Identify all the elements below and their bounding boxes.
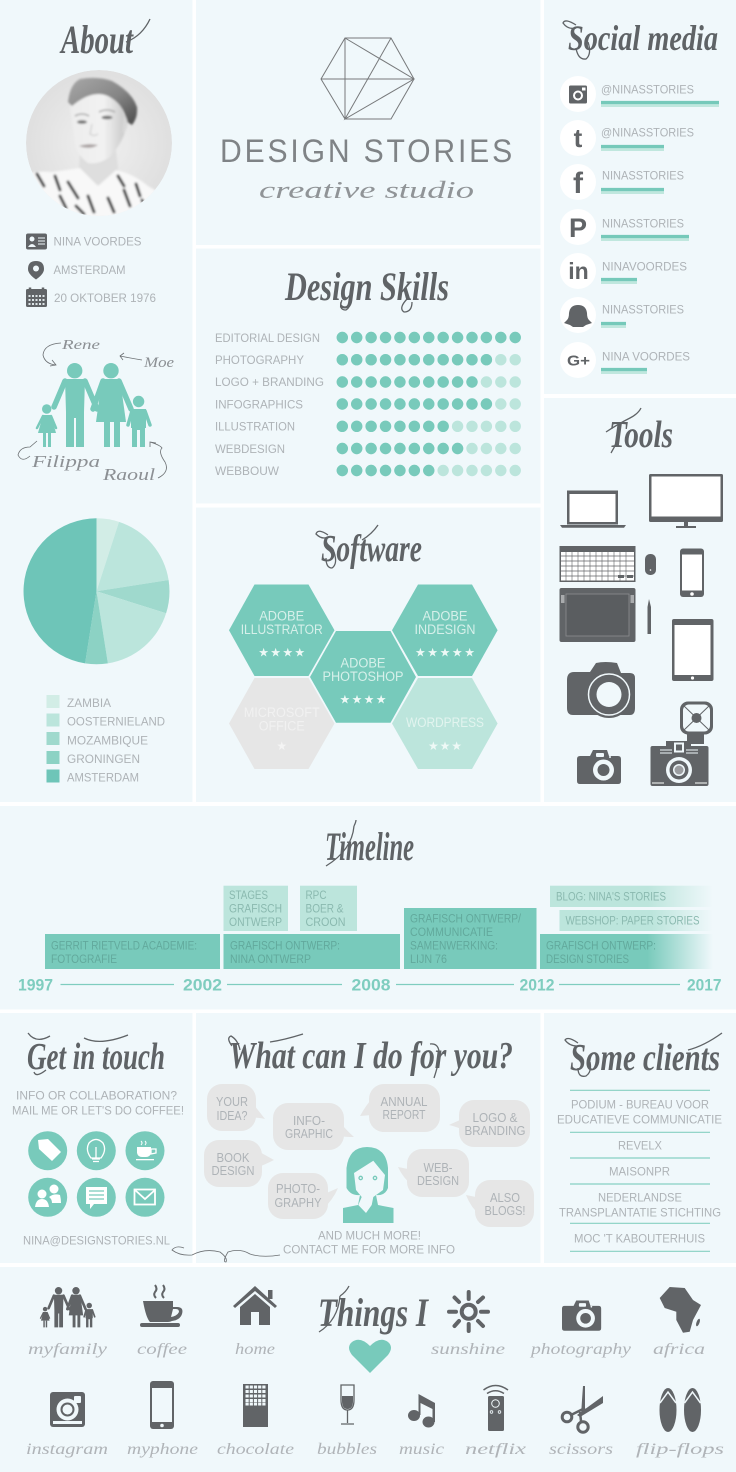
bubble: annual report: ANNUAL [380,1094,428,1109]
contact invitation: INFO OR COLLABORATION? [16,1088,177,1102]
bubble: annual report: REPORT [382,1107,426,1122]
timeline bars: ONTWERP [229,917,282,929]
icon: music note [408,1394,435,1428]
icon: smartphone [680,548,704,597]
icon: compact camera [577,750,621,784]
email address: NINA@DESIGNSTORIES.NL [23,1234,170,1248]
skill dot ratings [342,338,516,470]
timeline bars: FOTOGRAFIE [51,954,117,966]
panel: logo [196,0,540,245]
social icon circles [560,76,596,378]
icon: twitter: t [574,123,583,153]
row one captions: africa [653,1341,705,1358]
skill labels: WEBBOUW [215,464,280,478]
social handles: NINA VOORDES [602,350,690,364]
bubble: photography [268,1173,338,1219]
heading: tools: Tools [609,414,673,456]
row one captions [28,1341,705,1358]
icon: tablet [672,619,714,681]
client names: MOC 'T KABOUTERHUIS [574,1232,705,1246]
client names: PODIUM - BUREAU VOOR [571,1098,709,1112]
contact icon circles [28,1131,165,1217]
pie legend: GRONINGEN [67,752,140,766]
bubble: book design [204,1140,274,1187]
icon: bubbles glass [341,1385,354,1424]
icon: calendar [26,288,47,307]
pie legend: OOSTERNIELAND [67,714,165,728]
row one captions: home [235,1341,275,1358]
flourish: email to contact [172,1247,280,1262]
pie chart [24,518,169,664]
bubble: infographic: GRAPHIC [285,1126,333,1141]
family pictogram [37,363,150,447]
timeline axis: 1997 [18,976,53,994]
icon: sunshine [449,1292,488,1331]
bubble: book design: DESIGN [212,1163,254,1178]
bubble: also blogs [466,1180,534,1227]
icon: pinterest: P [569,213,587,243]
timeline bars: CROON [306,917,346,929]
brand name: DESIGN STORIES [220,133,515,169]
client names: EDUCATIEVE COMMUNICATIE [557,1112,722,1126]
hexagon: adobe photoshop: ADOBE [340,656,386,670]
skill labels: ILLUSTRATION [215,420,295,434]
timeline bars: GRAFISCH ONTWERP: [230,940,340,952]
row one captions: photography [530,1341,632,1358]
client names: REVELX [618,1138,662,1152]
hexagon: adobe indesign [392,584,498,676]
icon: location pin [28,261,44,280]
icon: instagram [569,86,587,104]
client names: NEDERLANDSE [598,1190,682,1204]
icon: light bulb [87,1140,105,1162]
icon: tag [38,1139,61,1161]
hexagon: adobe photoshop: ★★★★ [340,692,386,706]
icon: id card [26,234,47,250]
contact invitation [12,1088,184,1118]
client names [557,1098,722,1246]
bubble: web design [398,1149,469,1197]
pie legend: MOZAMBIQUE [67,734,148,748]
icon: monitor [649,474,723,528]
hexagon: microsoft office [229,678,334,769]
icon: remote [484,1386,508,1431]
icon: snapchat [564,305,592,327]
panel: about [0,0,192,802]
icon: home [233,1286,277,1325]
social handles [601,82,694,364]
hexagon: adobe photoshop [310,631,416,723]
bubble: also blogs: BLOGS! [484,1203,526,1218]
bubble: web design: WEB- [424,1160,452,1175]
hexagon: adobe illustrator: ★★★★ [258,646,305,660]
timeline bars: WEBSHOP: PAPER STORIES [566,916,700,928]
icon: phone [150,1381,174,1429]
heading: timeline: Timeline [325,824,414,869]
icon: facebook: f [573,167,584,200]
icon: stylus [648,599,651,634]
skill labels: LOGO + BRANDING [215,375,324,389]
heading: tools [606,408,673,456]
icon: linkedin: in [568,258,589,284]
row one captions: coffee [137,1341,187,1358]
bubble: book design: BOOK [216,1150,250,1165]
heading: design skills: Design Skills [284,264,449,309]
pie legend: AMSTERDAM [67,770,139,784]
bubble: also blogs: ALSO [490,1190,520,1205]
skill labels: WEBDESIGN [215,442,285,456]
hexagon: adobe illustrator: ILLUSTRATOR [241,622,323,637]
family name annotations: Raoul [102,465,155,484]
hexagon: wordpress: WORDPRESS [406,715,484,730]
timeline bars: BLOG: NINA'S STORIES [556,892,666,904]
timeline bars: SAMENWERKING: [410,940,498,952]
row one captions: sunshine [431,1341,505,1358]
panel: some clients [544,1013,736,1263]
icon: mouse [645,554,656,575]
timeline bars: GRAFISCH [229,904,282,916]
bubble: logo and branding: LOGO & [472,1110,518,1125]
name: NINA VOORDES [54,234,142,248]
timeline axis: 2012 [520,976,554,994]
family name annotations: Moe [143,355,174,371]
closing text [283,1228,455,1256]
bubble: logo and branding: BRANDING [464,1123,526,1138]
icon: flip flops [660,1388,701,1432]
family name annotations: Rene [61,338,100,353]
icon: chat message [86,1187,107,1209]
family name annotations: Filippa [31,452,100,471]
client names: TRANSPLANTATIE STICHTING [559,1206,721,1220]
heading: software: Software [321,528,422,570]
row two captions: flip-flops [636,1441,724,1458]
client names: MAISONPR [609,1164,670,1178]
row two captions: myphone [127,1441,198,1458]
panel: what can i do for you [196,1013,540,1263]
timeline bars: RPC [306,890,326,902]
pie legend: ZAMBIA [67,696,111,710]
icon: google plus: G+ [567,352,590,370]
panel: software [196,508,540,802]
bubble: web design: DESIGN [417,1173,459,1188]
bubble: annual report [360,1084,440,1132]
icon: chocolate [243,1384,268,1427]
icon: photography camera [562,1300,601,1331]
hexagon: microsoft office: MICROSOFT [244,705,320,720]
panel: things i like [0,1267,736,1472]
hexagon: adobe photoshop: PHOTOSHOP [322,669,404,684]
closing text: CONTACT ME FOR MORE INFO [283,1242,455,1256]
timeline axis: 2008 [352,976,390,994]
timeline bars: STAGES [229,890,268,902]
bubble: infographic [273,1103,354,1150]
icon: people [35,1184,61,1207]
timeline bars [45,886,713,969]
row two captions: scissors [549,1441,613,1458]
contact invitation: MAIL ME OR LET'S DO COFFEE! [12,1104,184,1118]
icon: envelope [134,1190,155,1204]
skill labels: INFOGRAPHICS [215,398,303,412]
logo hexagon [321,38,414,119]
heading: software [316,525,422,570]
timeline bars: COMMUNICATIE [410,927,493,939]
hexagon: microsoft office: ★ [276,739,287,753]
heading: get in touch: Get in touch [27,1036,165,1078]
timeline bars: NINA ONTWERP [230,954,311,966]
icon: drawing tablet [560,588,636,642]
icon: instagram [50,1392,85,1427]
icon: dslr camera [567,662,635,718]
bubble: infographic: INFO- [293,1113,325,1128]
timeline bars: GRAFISCH ONTWERP/ [410,914,522,926]
panel: get in touch [0,1013,192,1263]
hexagon: wordpress [392,678,498,769]
icon: africa [660,1287,701,1333]
panel: design skills [196,248,540,504]
hexagon: microsoft office: OFFICE [259,718,305,734]
skill labels: EDITORIAL DESIGN [215,331,320,345]
bubble: photography: PHOTO- [276,1181,320,1196]
pie legend [46,695,165,784]
timeline bars: GRAFISCH ONTWERP: [546,940,656,952]
family name annotations [18,338,174,484]
icon: keyboard [560,546,636,582]
bubble: your idea: YOUR [216,1094,248,1109]
bubble: logo and branding [449,1100,530,1147]
row two captions [26,1441,724,1458]
row one captions: myfamily [28,1341,108,1358]
timeline bars: LIJN 76 [410,954,447,966]
timeline bars: BOER & [306,904,344,916]
social reach bars [601,102,719,372]
hexagon: adobe illustrator: ADOBE [259,608,304,624]
hexagon: adobe indesign: ★★★★★ [415,646,475,660]
row two captions: instagram [26,1441,108,1458]
heading: timeline [325,820,414,869]
icon: coffee cup [136,1141,156,1160]
icon: heart [349,1340,391,1373]
timeline axis: 2002 [183,976,222,994]
avatar illustration [343,1147,394,1223]
social handles: @NINASSTORIES [601,82,694,96]
row two captions: music [399,1441,444,1458]
icon: scissors [562,1386,603,1432]
icon: coffee [140,1285,182,1327]
bubble: your idea: IDEA? [216,1108,248,1123]
tagline: creative studio [259,178,474,204]
social handles: NINASSTORIES [602,302,684,316]
skill labels: PHOTOGRAPHY [215,353,304,367]
social handles: @NINASSTORIES [601,126,694,140]
hexagon: adobe indesign: INDESIGN [414,622,476,637]
row two captions: netflix [465,1441,526,1458]
timeline bars: GERRIT RIETVELD ACADEMIE: [51,940,197,952]
panel: timeline [0,806,736,1010]
birth date: 20 OKTOBER 1976 [54,291,156,305]
heading: things i: Things I [318,1290,429,1335]
hexagon: wordpress: ★★★ [428,739,462,753]
row two captions: bubbles [317,1441,377,1458]
closing text: AND MUCH MORE! [318,1228,421,1242]
timeline axis [18,976,722,994]
heading: about: About [59,17,134,62]
icon: laptop [560,490,626,528]
city: AMSTERDAM [54,263,126,277]
icon: family [40,1287,95,1327]
timeline bars: DESIGN STORIES [546,954,629,966]
client dividers [570,1090,710,1251]
skill labels [215,331,324,478]
bubble: your idea [207,1084,265,1131]
hexagon: adobe illustrator [229,584,334,676]
social handles: NINASSTORIES [602,168,684,182]
row two captions: chocolate [217,1441,294,1458]
panel: tools [544,398,736,802]
panel: social media [544,0,736,394]
heading: what can i do for you: What can I do for you? [229,1035,513,1077]
portrait photo [26,70,172,225]
heading: get in touch [27,1033,165,1078]
social handles: NINASSTORIES [602,216,684,230]
bubble: photography: GRAPHY [274,1195,322,1210]
timeline axis: 2017 [687,976,722,994]
icon: diana camera with flash [650,702,713,786]
hexagon: adobe indesign: ADOBE [422,608,468,624]
social handles: NINAVOORDES [602,260,687,274]
